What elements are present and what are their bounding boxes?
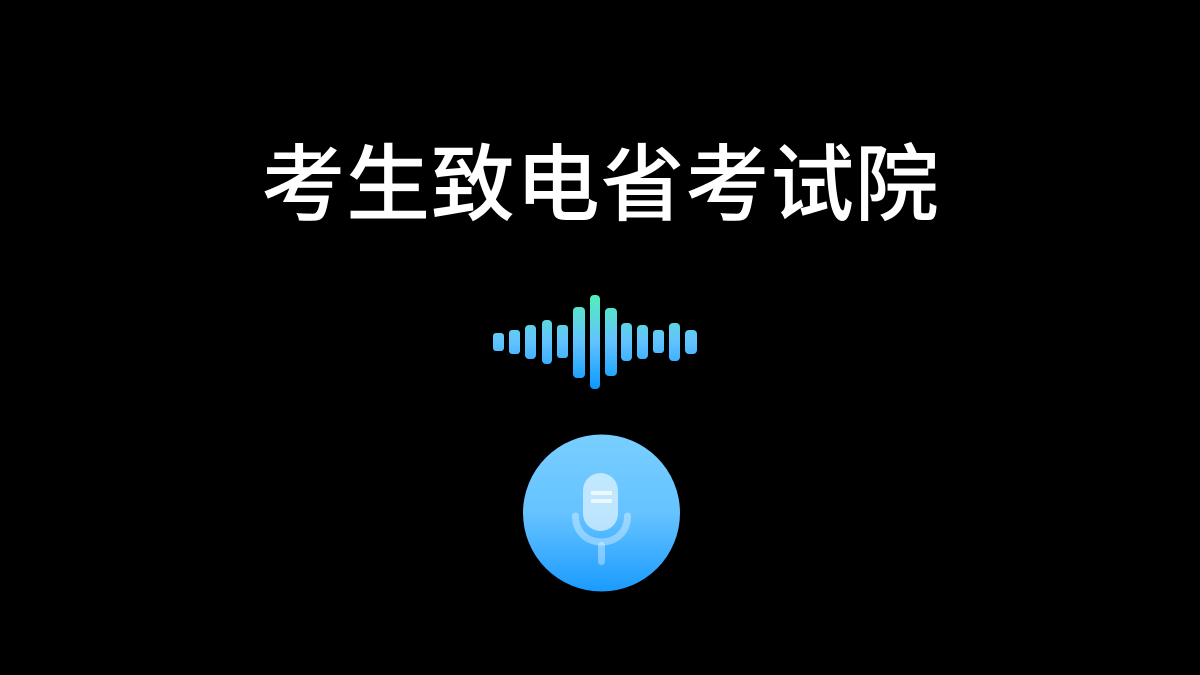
title: 考生致电省考试院 [261,138,940,232]
icon: sound waveform [493,295,697,389]
icon: microphone button [523,434,680,592]
